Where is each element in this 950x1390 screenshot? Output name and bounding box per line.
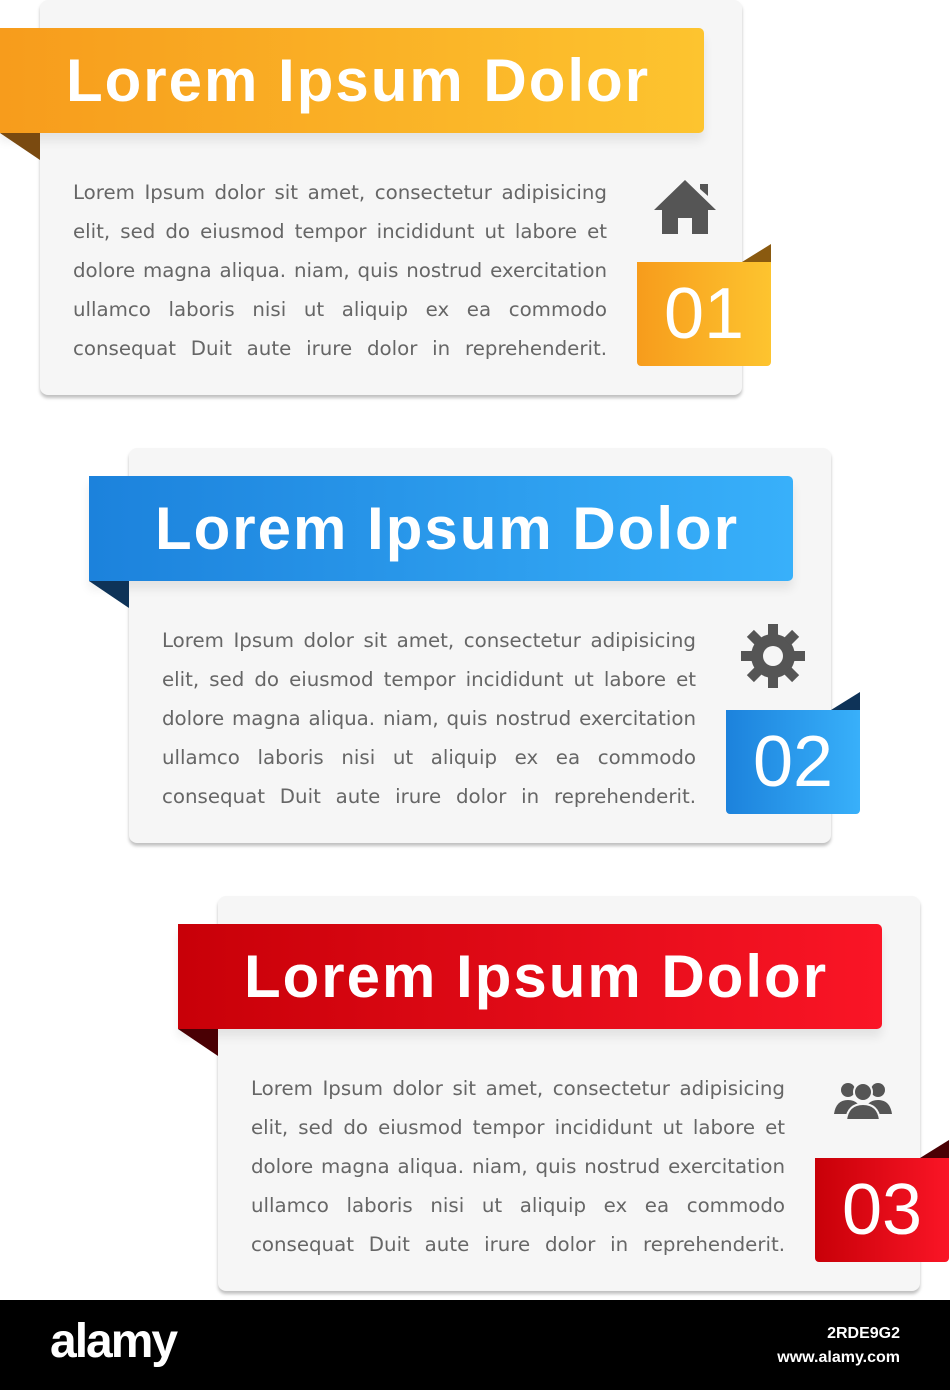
body text: dolore magna aliqua. niam, quis nostrud exercitation xyxy=(162,707,696,730)
number 02: 02 xyxy=(753,722,833,802)
banner fold xyxy=(178,1029,218,1056)
body text: consequat Duit aute irure dolor in reprehenderit. xyxy=(251,1233,785,1256)
logo: alamy xyxy=(50,1315,176,1368)
body text: elit, sed do eiusmod tempor incididunt ut labore et xyxy=(73,220,607,243)
panel: 01 xyxy=(0,0,771,400)
banner title: Lorem Ipsum Dolor xyxy=(244,943,828,1010)
card background xyxy=(218,896,920,1291)
card background xyxy=(40,0,742,395)
number 02 xyxy=(726,710,860,814)
banner fold xyxy=(0,133,40,160)
body text xyxy=(73,181,607,360)
body text: Lorem Ipsum dolor sit amet, consectetur adipisicing xyxy=(251,1077,785,1100)
icon: gear xyxy=(741,624,805,688)
panel: 03 xyxy=(178,896,949,1296)
body text: elit, sed do eiusmod tempor incididunt ut labore et xyxy=(162,668,696,691)
number fold xyxy=(742,244,771,262)
banner title xyxy=(0,28,704,133)
panel: 02 xyxy=(88,448,860,848)
body text: elit, sed do eiusmod tempor incididunt ut labore et xyxy=(251,1116,785,1139)
icon: house xyxy=(654,180,716,234)
number 01 xyxy=(637,262,771,366)
body text: dolore magna aliqua. niam, quis nostrud exercitation xyxy=(251,1155,785,1178)
body text: consequat Duit aute irure dolor in reprehenderit. xyxy=(162,785,696,808)
body text: Lorem Ipsum dolor sit amet, consectetur adipisicing xyxy=(73,181,607,204)
card background xyxy=(129,448,831,843)
number 03: 03 xyxy=(842,1170,922,1250)
footer: alamy watermark bar xyxy=(0,1300,950,1390)
body text: ullamco laboris nisi ut aliquip ex ea commodo xyxy=(251,1194,785,1217)
number 01: 01 xyxy=(664,274,744,354)
body text xyxy=(251,1077,785,1256)
body text: consequat Duit aute irure dolor in reprehenderit. xyxy=(73,337,607,360)
body text: ullamco laboris nisi ut aliquip ex ea commodo xyxy=(162,746,696,769)
image id and url xyxy=(777,1325,900,1366)
body text: Lorem Ipsum dolor sit amet, consectetur adipisicing xyxy=(162,629,696,652)
number 03 xyxy=(815,1158,949,1262)
image id and url: www.alamy.com xyxy=(777,1349,900,1366)
banner title: Lorem Ipsum Dolor xyxy=(66,47,650,114)
banner title xyxy=(178,924,882,1029)
body text: dolore magna aliqua. niam, quis nostrud exercitation xyxy=(73,259,607,282)
body text: ullamco laboris nisi ut aliquip ex ea commodo xyxy=(73,298,607,321)
body text xyxy=(162,629,696,808)
banner fold xyxy=(89,581,129,608)
banner title xyxy=(89,476,793,581)
number fold xyxy=(831,692,860,710)
banner title: Lorem Ipsum Dolor xyxy=(155,495,739,562)
number fold xyxy=(920,1140,949,1158)
image id and url: 2RDE9G2 xyxy=(827,1325,900,1342)
icon: people xyxy=(834,1083,892,1119)
